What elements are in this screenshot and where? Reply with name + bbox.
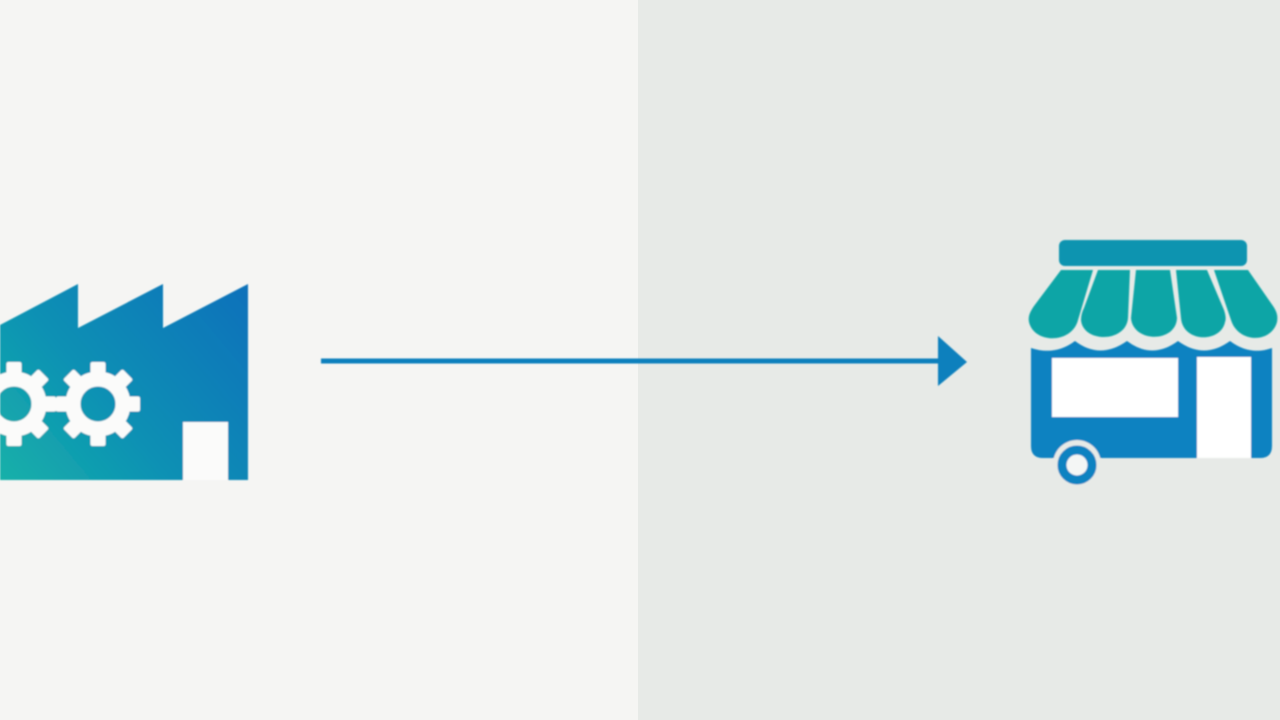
- factory building: [0, 284, 248, 480]
- stall body: [1031, 341, 1272, 458]
- gear: left: [0, 362, 56, 446]
- icon: factory: [0, 284, 248, 480]
- factory door: [183, 422, 228, 480]
- panel: right background: [638, 0, 1280, 720]
- panel: left background: [0, 0, 638, 720]
- gear connector: [42, 397, 68, 411]
- icon: market stall: [1029, 240, 1277, 488]
- awning stripes: [1029, 270, 1277, 338]
- stall window: [1052, 358, 1178, 417]
- stall wheel: [1053, 440, 1101, 488]
- gear: right: [56, 362, 140, 446]
- stall door: [1197, 357, 1251, 458]
- stall roof bar: [1059, 240, 1247, 266]
- arrow: factory to store: [321, 336, 967, 386]
